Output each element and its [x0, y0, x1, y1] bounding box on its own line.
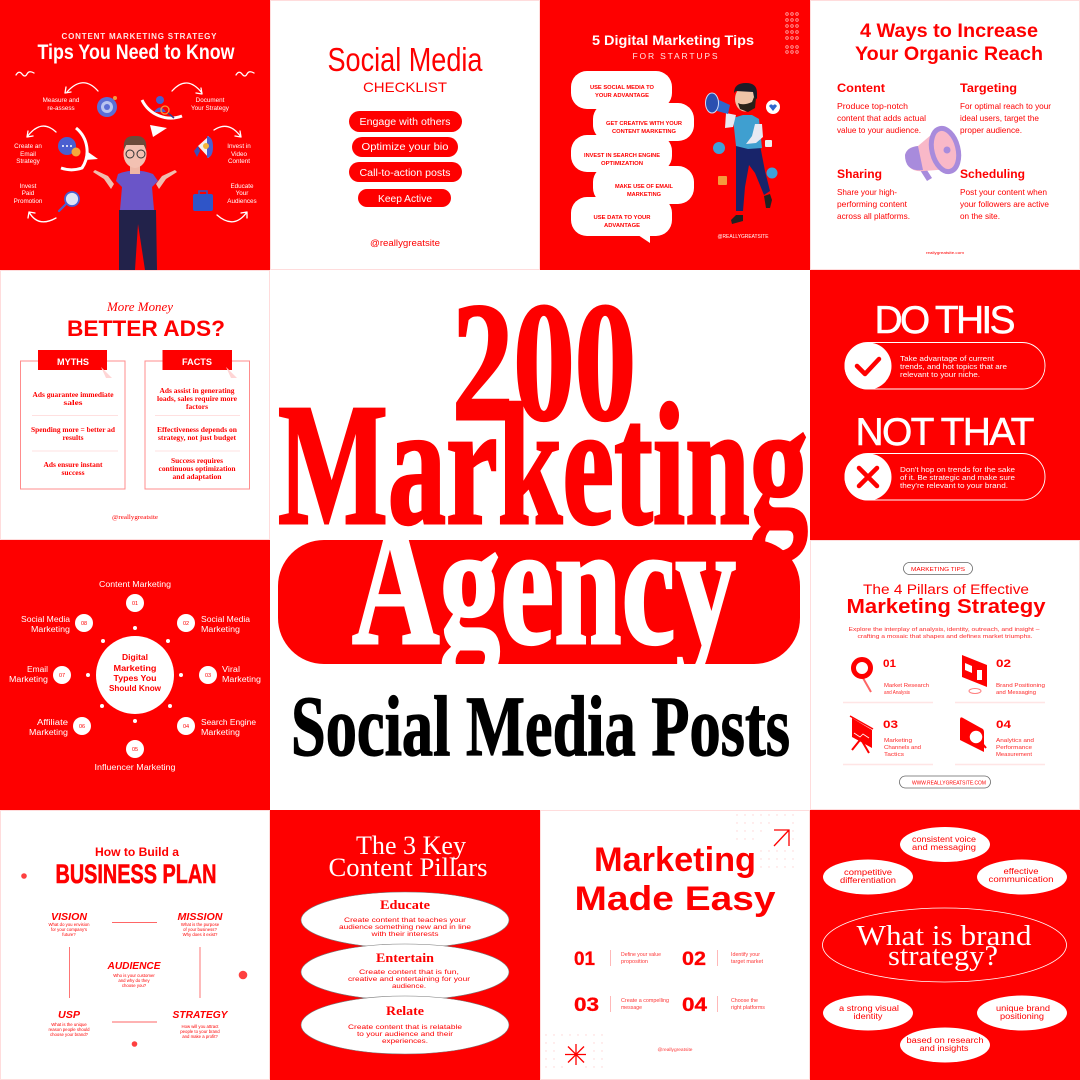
block: vision: What do you envision — [48, 922, 90, 927]
step labels: Content — [228, 158, 250, 165]
type labels: Marketing — [201, 625, 240, 634]
block: audience: Who is your customer — [113, 973, 155, 978]
block: vision — [48, 912, 90, 937]
steps: message — [621, 1005, 642, 1011]
facts column: strategy, not just budget — [158, 434, 237, 442]
steps: target market — [731, 959, 764, 965]
panel: 5 digital marketing tips — [540, 0, 810, 270]
social icons — [713, 100, 780, 185]
character with megaphone — [706, 83, 772, 224]
step labels: Email — [20, 151, 36, 158]
step labels: Measure and — [43, 97, 80, 104]
myths column: MYTHS — [57, 357, 89, 367]
block: vision: for your company's — [51, 927, 87, 932]
panel: 4 pillars of effective marketing strategy — [810, 540, 1080, 810]
pillar 01: Market Research — [884, 683, 929, 689]
step labels: Strategy — [16, 158, 41, 165]
numbered nodes: 03 — [205, 673, 211, 679]
tip bubbles: MAKE USE OF EMAIL — [615, 184, 674, 190]
icon: magnifier — [59, 192, 79, 211]
url badge — [900, 776, 990, 788]
do row: relevant to your niche. — [900, 372, 980, 379]
type labels: Search Engine — [201, 718, 256, 727]
pillar 04: Analytics and — [996, 738, 1034, 744]
do row — [844, 342, 1045, 390]
checklist pills: Engage with others — [360, 117, 450, 128]
type labels: Marketing — [201, 728, 240, 737]
title pill — [278, 540, 800, 664]
ellipse: entertain: audience. — [392, 983, 426, 990]
icon: megaphone — [194, 136, 213, 158]
heading: 5 digital marketing tips: 5 Digital Marketing Tips — [592, 32, 754, 48]
tip bubbles: YOUR ADVANTAGE — [595, 93, 649, 99]
white speech-bubble arcs — [61, 100, 182, 170]
block: content: Content — [837, 81, 885, 95]
block: strategy: people to your brand — [180, 1029, 220, 1034]
footer: reallygreatsite.com — [926, 251, 964, 255]
ellipse: educate: audience something new and in line — [339, 924, 471, 931]
step labels: Invest in — [227, 143, 251, 150]
type labels: Email — [27, 665, 48, 674]
checklist pills — [349, 111, 462, 207]
step labels: Paid — [22, 190, 35, 197]
steps: Choose the — [731, 998, 758, 1004]
center circle: Digital — [122, 652, 148, 662]
facts column: Ads assist in generating — [160, 387, 235, 395]
step labels: Your — [236, 190, 248, 197]
pillar 04: Performance — [996, 745, 1032, 751]
tip bubbles: INVEST IN SEARCH ENGINE — [584, 153, 660, 159]
icon: briefcase — [193, 191, 213, 211]
facts column: Success requires — [171, 457, 223, 465]
block: content: value to your audience. — [837, 126, 921, 135]
title: 4 Ways to Increase — [860, 20, 1038, 42]
heading: social media: Social Media — [328, 41, 483, 78]
bubble: unique brand positioning — [977, 996, 1067, 1030]
step labels: Document — [196, 97, 225, 104]
type labels — [9, 580, 261, 772]
heading: do this: DO THIS — [874, 299, 1016, 342]
icon: user search — [154, 96, 174, 118]
block: content: content that adds actual — [837, 114, 926, 123]
ellipse: entertain: creative and entertaining for your — [348, 976, 471, 983]
title: 200: 200 — [452, 268, 636, 456]
handle: @reallygreatsite — [112, 515, 158, 521]
numbered nodes: 04 — [183, 724, 189, 730]
decorative dots — [21, 873, 247, 1047]
tip bubbles: USE SOCIAL MEDIA TO — [590, 85, 654, 91]
steps: 03 — [574, 995, 599, 1016]
center circle: Should Know — [109, 683, 161, 693]
facts column: loads, sales require more — [157, 395, 237, 403]
heading: checklist: CHECKLIST — [363, 79, 447, 95]
icon: purple megaphone — [905, 126, 963, 181]
block: audience: choose you? — [122, 983, 147, 988]
block: mission: MISSION — [178, 912, 223, 923]
bubble: effective communication: effective — [1004, 867, 1039, 876]
bubble: effective communication: communication — [988, 875, 1054, 884]
panel: 3 key content pillars: Content Pillars — [328, 853, 487, 882]
steps — [574, 949, 765, 1016]
block: content — [837, 81, 926, 135]
steps: 02 — [682, 949, 706, 970]
checklist pills: Optimize your bio — [362, 142, 449, 153]
steps: 04 — [682, 995, 708, 1016]
don't row — [844, 454, 1045, 500]
pillar 03: Channels and — [884, 745, 921, 751]
ellipse: entertain: Create content that is fun, — [359, 969, 459, 976]
ellipse: relate — [301, 996, 509, 1054]
step labels: Audiences — [227, 198, 257, 205]
pillar 01: 01 — [883, 658, 896, 670]
ellipse: relate: Relate — [386, 1003, 424, 1018]
tip bubbles: GET CREATIVE WITH YOUR — [606, 121, 682, 127]
ellipse: educate: with their interests — [370, 931, 439, 938]
center circle: Marketing — [114, 663, 156, 673]
bubble: unique brand positioning: positioning — [1000, 1012, 1044, 1021]
heading: content marketing strategy: CONTENT MARKETING STRATEGY — [62, 32, 217, 41]
block: sharing: Share your high- — [837, 188, 897, 197]
type labels: Viral — [222, 665, 240, 674]
heading: not that: NOT THAT — [856, 411, 1034, 454]
character illustration — [93, 136, 177, 270]
step labels: Educate — [230, 183, 254, 190]
dot pattern — [786, 13, 798, 53]
pillar 02 — [962, 655, 1045, 696]
block: usp: choose your brand? — [50, 1032, 89, 1037]
bubble: competitive differentiation — [823, 860, 913, 894]
bubble: strong visual identity: identity — [854, 1012, 882, 1021]
panel: central title — [278, 268, 808, 774]
block: audience: AUDIENCE — [106, 961, 161, 972]
block: sharing: Sharing — [837, 167, 882, 181]
central outlined ellipse: strategy? — [888, 940, 998, 972]
bubble: competitive differentiation: differentiation — [840, 876, 896, 885]
bubble: research and insights: and insights — [920, 1044, 968, 1053]
tip bubbles — [571, 71, 694, 243]
type labels: Content Marketing — [99, 580, 171, 589]
type labels: Marketing — [31, 625, 70, 634]
title: Marketing — [594, 841, 756, 879]
steps: Create a compelling — [621, 998, 669, 1004]
block: usp — [48, 1010, 90, 1037]
block: sharing — [837, 167, 910, 221]
pillar 02: and Messaging — [996, 690, 1036, 696]
block: vision: future? — [62, 932, 76, 937]
facts column: factors — [186, 403, 208, 411]
heading: marketing strategy: Marketing Strategy — [846, 596, 1046, 618]
don't row: they're relevant to your brand. — [900, 483, 1008, 490]
panel: 3 key content pillars — [270, 810, 540, 1080]
decorative squiggles and arcs — [16, 72, 254, 222]
block: targeting — [960, 81, 1051, 135]
icon: target — [97, 96, 117, 117]
pillar 03: Tactics — [884, 752, 904, 758]
badge: marketing tips — [904, 562, 972, 574]
numbered nodes: 02 — [183, 621, 189, 627]
type labels: Social Media — [21, 615, 71, 624]
type labels: Marketing — [9, 675, 48, 684]
facts column — [145, 350, 250, 489]
block: targeting: For optimal reach to your — [960, 102, 1051, 111]
block: audience: and why do they — [118, 978, 150, 983]
panel: content marketing strategy tips — [0, 0, 270, 270]
do row: trends, and hot topics that are — [900, 364, 1007, 371]
block: targeting: ideal users, target the — [960, 114, 1039, 123]
step labels: re-assess — [47, 105, 75, 112]
block: sharing: across all platforms. — [837, 212, 910, 221]
bubble: research and insights — [900, 1028, 990, 1062]
panel: digital marketing types — [0, 540, 270, 810]
heading: for startups: FOR STARTUPS — [632, 51, 718, 61]
pillar 01: and Analysis — [884, 690, 910, 696]
subtitle: social media posts: Social Media Posts — [291, 678, 790, 774]
tip bubbles: USE DATA TO YOUR — [594, 215, 651, 221]
bubble: competitive differentiation: competitive — [844, 868, 893, 877]
block: content: Produce top-notch — [837, 102, 908, 111]
type labels: Social Media — [201, 615, 251, 624]
pillar 04: 04 — [996, 719, 1012, 731]
panel: 4 ways to increase organic reach — [810, 0, 1080, 270]
title: agency: Agency — [352, 488, 736, 681]
panel: marketing made easy — [540, 810, 810, 1080]
handle: @reallygreatsite — [370, 238, 440, 248]
facts column: continuous optimization — [158, 465, 236, 473]
block: audience — [106, 961, 161, 988]
panel: do this not that — [810, 270, 1080, 540]
ellipse: educate — [301, 892, 509, 948]
pillar 01 — [854, 658, 929, 696]
facts column: FACTS — [182, 357, 212, 367]
type labels: Marketing — [29, 728, 68, 737]
block: mission — [178, 912, 223, 937]
facts column: Effectiveness depends on — [157, 426, 237, 434]
type labels: Affiliate — [37, 718, 68, 727]
tip bubbles: OPTIMIZATION — [601, 161, 643, 167]
block: vision: VISION — [51, 912, 88, 923]
bubble: research and insights: based on research — [906, 1036, 984, 1045]
ellipse: relate: to your audience and their — [357, 1031, 454, 1038]
intro text: crafting a mosaic that shapes and defines market triumphs. — [858, 634, 1032, 640]
divider shadows — [843, 702, 1045, 764]
heading: more money: More Money — [106, 300, 173, 314]
intro text — [848, 627, 1040, 640]
heading: The 3 Key — [356, 831, 466, 860]
ellipse: educate: Educate — [380, 897, 430, 912]
icon: asterisk — [565, 1044, 586, 1065]
heading: the 4 pillars: The 4 Pillars of Effective — [863, 582, 1029, 597]
step labels: Promotion — [14, 198, 43, 205]
block: usp: What is the unique — [51, 1022, 87, 1027]
bubble: consistent voice: and messaging — [912, 843, 976, 852]
type labels: Marketing — [222, 675, 261, 684]
block: usp: USP — [58, 1010, 80, 1021]
icon: arrow — [774, 830, 789, 846]
badge: marketing tips: MARKETING TIPS — [911, 567, 965, 573]
title: marketing: Marketing — [278, 368, 808, 561]
block: scheduling: Scheduling — [960, 167, 1025, 181]
do row: Take advantage of current — [900, 356, 994, 363]
bubble: unique brand positioning: unique brand — [996, 1004, 1050, 1013]
pillar 04 — [960, 717, 1034, 758]
ellipse: relate: Create content that is relatable — [348, 1024, 462, 1031]
steps: right platforms — [731, 1005, 765, 1011]
pillar 04: Measurement — [996, 752, 1033, 758]
block: strategy: and make a profit? — [182, 1034, 218, 1039]
panel: 4 ways to increase organic reach: Your Organic Reach — [855, 43, 1043, 65]
numbered nodes: 06 — [79, 724, 85, 730]
myths column: Ads guarantee immediate — [32, 391, 114, 399]
bubble: consistent voice: consistent voice — [912, 835, 977, 844]
numbered nodes: 08 — [81, 621, 87, 627]
numbered nodes: 01 — [132, 601, 138, 607]
pillar 02: 02 — [996, 658, 1011, 670]
block: scheduling — [960, 167, 1049, 221]
heading: how to build a: How to Build a — [95, 845, 179, 859]
numbered nodes — [53, 594, 217, 758]
ellipse: educate: Create content that teaches your — [344, 917, 467, 924]
steps: Identify your — [731, 952, 760, 958]
block: mission: What is the purpose — [181, 922, 220, 927]
tip bubbles: MARKETING — [627, 192, 661, 198]
ellipse: entertain — [301, 944, 509, 1000]
small connector dots — [86, 626, 183, 723]
block: targeting: proper audience. — [960, 126, 1022, 135]
heading: business plan: BUSINESS PLAN — [56, 859, 216, 889]
checklist pills: Call-to-action posts — [360, 168, 450, 179]
bubble: consistent voice — [900, 827, 990, 862]
steps: 01 — [574, 949, 595, 970]
steps: proposition — [621, 959, 648, 965]
pillar 03: 03 — [883, 719, 898, 731]
block: scheduling: your followers are active — [960, 200, 1049, 209]
step labels — [14, 97, 257, 205]
panel: what is brand strategy — [810, 810, 1080, 1080]
handle: @reallygreatsite — [658, 1047, 693, 1052]
central outlined ellipse — [822, 908, 1066, 982]
step labels: Video — [231, 151, 247, 158]
intro text: Explore the interplay of analysis, identity, outreach, and insight – — [848, 627, 1040, 633]
panel: how to build a business plan — [0, 810, 270, 1080]
dotted patterns — [545, 814, 794, 1068]
block: targeting: Targeting — [960, 81, 1017, 95]
connector lines — [70, 922, 200, 1022]
block: scheduling: Post your content when — [960, 188, 1047, 197]
myths column: sales — [64, 399, 83, 407]
icon: chat bubbles — [58, 137, 80, 156]
myths column: Spending more = better ad — [31, 426, 115, 434]
pillar 03: Marketing — [884, 738, 912, 744]
block: mission: Why does it exist? — [183, 932, 218, 937]
don't row: Don't hop on trends for the sake — [900, 467, 1015, 474]
pillar 02: Brand Positioning — [996, 683, 1045, 689]
ellipse: relate: experiences. — [382, 1038, 428, 1045]
tip bubbles: ADVANTAGE — [604, 223, 640, 229]
myths column: Ads ensure instant — [44, 461, 103, 469]
myths column: success — [62, 469, 85, 477]
type labels: Influencer Marketing — [94, 763, 176, 772]
ellipse: entertain: Entertain — [376, 950, 435, 965]
facts column: and adaptation — [172, 473, 222, 481]
myths column: results — [62, 434, 84, 442]
block: strategy: STRATEGY — [172, 1010, 229, 1021]
steps: Define your value — [621, 952, 661, 958]
heading: better ads: BETTER ADS? — [67, 316, 225, 341]
panel: myths vs facts better ads — [0, 270, 270, 540]
panel: social media checklist — [270, 0, 540, 270]
step labels: Your Strategy — [191, 105, 230, 112]
tip bubbles: CONTENT MARKETING — [612, 129, 676, 135]
pillar 03 — [850, 716, 921, 758]
block: mission: of your business? — [183, 927, 217, 932]
step labels: Create an — [14, 143, 42, 150]
checklist pills: Keep Active — [378, 194, 432, 205]
heading: tips you need to know: Tips You Need to Know — [38, 41, 235, 64]
bubble: strong visual identity — [823, 996, 913, 1030]
block: strategy: How will you attract — [181, 1024, 219, 1029]
myths column — [20, 350, 125, 489]
handle: @REALLYGREATSITE — [718, 234, 769, 240]
block: sharing: performing content — [837, 200, 908, 209]
url badge: WWW.REALLYGREATSITE.COM — [912, 780, 986, 786]
step labels: Invest — [20, 183, 37, 190]
bubble: strong visual identity: a strong visual — [839, 1004, 899, 1013]
don't row: of it. Be strategic and make sure — [900, 475, 1015, 482]
center circle: Types You — [114, 673, 156, 683]
block: scheduling: on the site. — [960, 212, 1000, 221]
numbered nodes: 05 — [132, 747, 138, 753]
central outlined ellipse: What is brand — [856, 920, 1032, 952]
panel: marketing made easy: Made Easy — [574, 880, 776, 918]
block: strategy — [172, 1010, 229, 1039]
center circle — [96, 636, 174, 714]
bubble: effective communication — [977, 860, 1067, 894]
numbered nodes: 07 — [59, 673, 65, 679]
block: usp: reason people should — [48, 1027, 90, 1032]
